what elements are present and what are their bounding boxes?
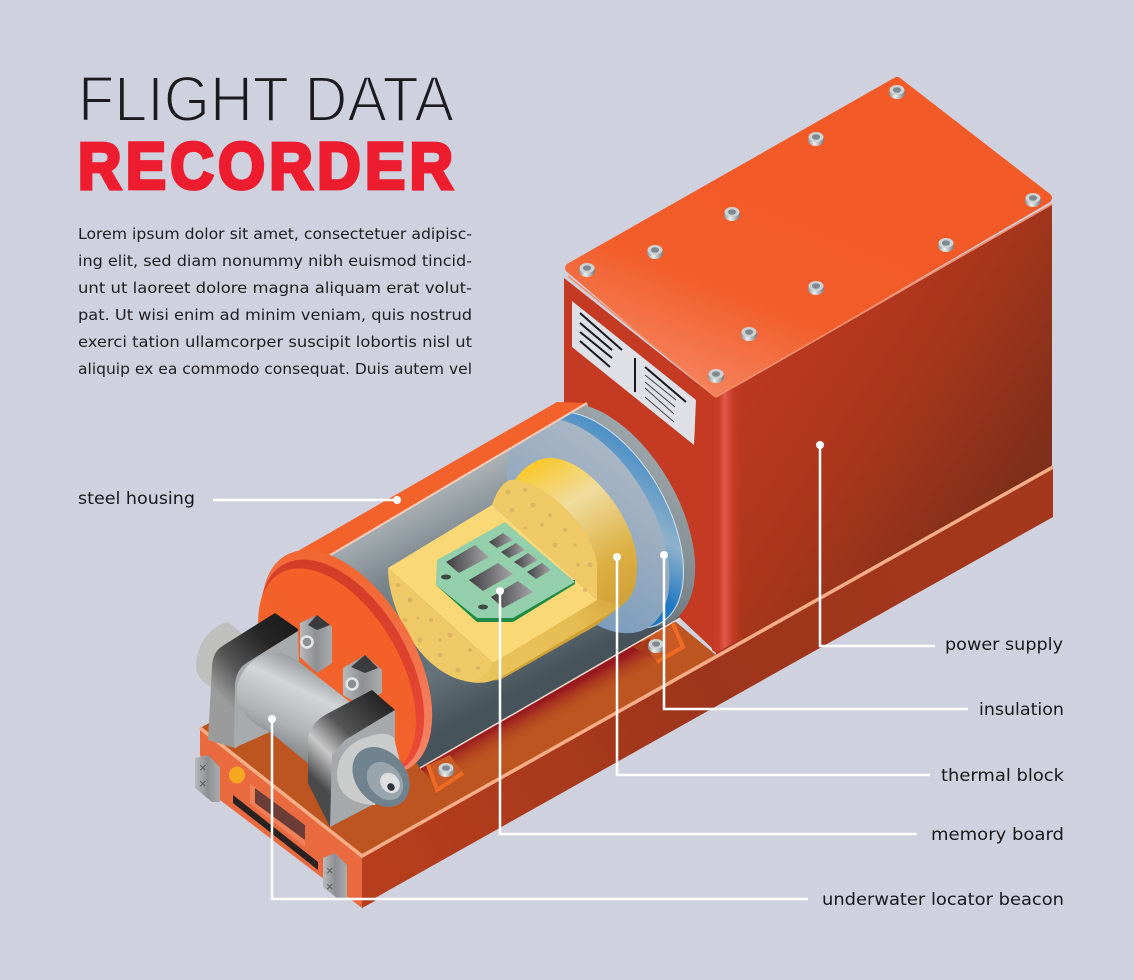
callout: underwater locator beacon xyxy=(268,715,1064,910)
callout: power supply: power supply xyxy=(945,635,1063,655)
mounting feet xyxy=(428,624,683,790)
right clip: × xyxy=(326,863,334,878)
base platform xyxy=(200,467,1053,908)
base front edge highlight xyxy=(200,467,1053,856)
intro text block: Lorem ipsum dolor sit amet, consectetuer adipisc- xyxy=(78,225,472,243)
insulation and rear rim xyxy=(506,406,696,634)
intro text block: ing elit, sed diam nonummy nibh euismod tincid- xyxy=(78,252,472,270)
mounting lugs xyxy=(300,615,382,705)
top screws xyxy=(579,85,1041,383)
left bracket xyxy=(208,613,300,748)
display window xyxy=(250,783,305,847)
title: RECORDER xyxy=(78,130,453,203)
title xyxy=(78,63,454,203)
callout: insulation: insulation xyxy=(979,700,1064,720)
rear nose xyxy=(196,622,250,690)
left clip xyxy=(195,755,220,802)
left clip: × xyxy=(199,776,207,791)
callout: steel housing xyxy=(78,489,401,509)
front panel details xyxy=(195,755,347,898)
steel housing body xyxy=(290,403,680,768)
label plate xyxy=(572,301,696,445)
callout: insulation xyxy=(660,551,1064,720)
underwater locator beacon xyxy=(196,613,421,827)
housing edge highlight xyxy=(420,618,680,768)
status light xyxy=(229,766,245,784)
left clip: × xyxy=(199,760,207,775)
memory board xyxy=(436,522,575,622)
title: FLIGHT DATA xyxy=(78,63,454,135)
infographic canvas xyxy=(78,76,1064,908)
callout: underwater locator beacon: underwater locator beacon xyxy=(822,890,1064,910)
intro text block: aliquip ex ea commodo consequat. Duis autem vel xyxy=(78,360,472,378)
callout: thermal block: thermal block xyxy=(941,766,1064,786)
right clip xyxy=(323,853,347,898)
main barrel xyxy=(237,653,350,765)
cylinder shadow on base xyxy=(420,636,668,790)
cylinder xyxy=(258,402,696,770)
intro text block: exerci tation ullamcorper suscipit lobortis nisl ut xyxy=(78,333,472,351)
thermal block xyxy=(388,458,637,683)
intro text block xyxy=(78,225,472,378)
callout: steel housing: steel housing xyxy=(78,489,195,509)
orange top strip xyxy=(298,402,587,557)
right bracket xyxy=(308,690,395,827)
card slot xyxy=(233,795,318,870)
nose with end cap xyxy=(337,734,421,818)
right clip: × xyxy=(326,879,334,894)
callout: power supply xyxy=(816,441,1063,655)
power supply box xyxy=(564,82,1052,655)
glass disc xyxy=(506,420,670,634)
intro text block: pat. Ut wisi enim ad minim veniam, quis nostrud xyxy=(78,306,472,324)
intro text block: unt ut laoreet dolore magna aliquam erat volut- xyxy=(78,279,472,297)
front disc xyxy=(225,521,467,803)
callout: thermal block xyxy=(613,553,1064,786)
callout: memory board: memory board xyxy=(931,825,1064,845)
callout: memory board xyxy=(496,587,1064,845)
